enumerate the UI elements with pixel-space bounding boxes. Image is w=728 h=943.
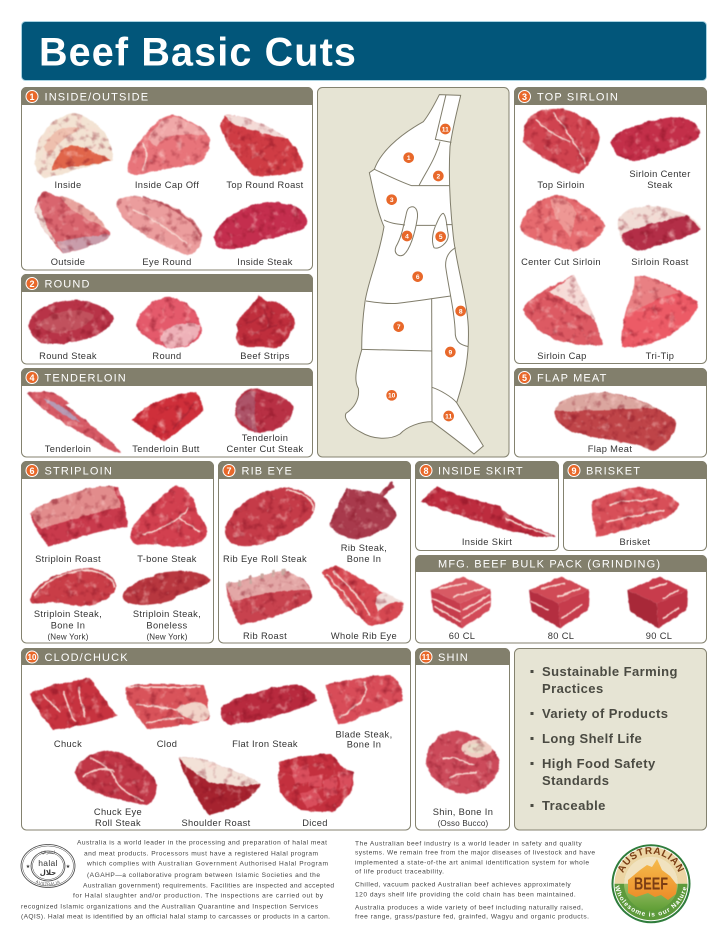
panel: benefits list: Standards — [542, 773, 609, 788]
label: Striploin Steak, Bone In (New York): Striploin Steak, — [34, 609, 102, 619]
icon: 80 CL bulk block — [529, 577, 589, 628]
panel: 3 top sirloin: TOP SIRLOIN — [537, 92, 619, 104]
panel: 4 tenderloin — [21, 368, 313, 457]
label: Striploin Steak, Boneless (New York): (New York) — [146, 632, 188, 642]
icon: halal certification stamp: AUSTRALIA — [36, 880, 60, 886]
panel: mfg. beef bulk pack — [415, 555, 707, 643]
text block: industry statement: free range, grass/pasture fed, grainfed, Wagyu and organic products. — [355, 914, 589, 921]
label: Chuck Eye Roll Steak: Roll Steak — [95, 818, 141, 828]
label: Sirloin Center Steak — [629, 169, 691, 190]
carcass silhouette: 8 — [459, 308, 463, 315]
panel: 8 inside skirt: 8 — [423, 466, 429, 476]
panel: 8 inside skirt: INSIDE SKIRT — [438, 466, 524, 478]
icon: Australian Beef logo: BEEF — [634, 874, 668, 894]
panel: 7 rib eye — [218, 461, 411, 643]
label: Inside: Inside — [55, 180, 81, 190]
label: Round Steak: Round Steak — [39, 351, 97, 361]
panel: benefits list: Traceable — [542, 798, 606, 813]
text block: halal statement: and meat products. Processors must have a registered Halal program — [84, 850, 318, 857]
panel: 9 brisket — [563, 461, 707, 550]
meat photo: inside skirt — [421, 487, 556, 537]
icon: halal certification stamp: أستراليا — [41, 850, 55, 855]
text block: halal statement: Australian government) requirements. Facilities are inspected and accepted — [83, 883, 334, 890]
icon: Australian Beef logo — [612, 844, 690, 924]
label: Clod: Clod — [157, 739, 177, 749]
carcass silhouette: 11 — [445, 413, 452, 420]
label: Rib Steak, Bone In: Rib Steak, — [341, 543, 387, 553]
label: Shin, Bone In (Osso Bucco) — [433, 807, 493, 828]
label: Tri-Tip: Tri-Tip — [646, 351, 674, 361]
panel: 11 shin: 11 — [422, 653, 431, 662]
label: Round: Round — [152, 351, 182, 361]
panel: 2 round: 2 — [29, 279, 35, 289]
label: Center Cut Sirloin: Center Cut Sirloin — [521, 257, 601, 267]
panel: benefits list: Variety of Products — [542, 706, 668, 721]
panel: 6 striploin: 6 — [29, 466, 35, 476]
panel: 10 clod/chuck — [21, 648, 411, 830]
carcass silhouette: 6 — [416, 274, 420, 281]
label: Eye Round: Eye Round — [142, 257, 192, 267]
carcass silhouette: 4 — [405, 233, 409, 240]
text block: industry statement: implemented a state-of-the art animal identification system for whole — [355, 860, 589, 867]
label: Sirloin Cap: Sirloin Cap — [537, 351, 587, 361]
label: Tenderloin: Tenderloin — [45, 444, 91, 454]
panel: benefits list: Long Shelf Life — [542, 731, 642, 746]
label: Chuck Eye Roll Steak: Chuck Eye — [94, 807, 142, 817]
label: Sirloin Center Steak: Sirloin Center — [629, 169, 691, 179]
text block: industry statement: The Australian beef industry is a world leader in safety and quality — [355, 840, 582, 847]
panel: 6 striploin: STRIPLOIN — [44, 466, 113, 478]
panel: benefits list — [514, 648, 706, 830]
panel: benefits list: Sustainable Farming — [542, 664, 678, 679]
label: Blade Steak, Bone In: Blade Steak, — [335, 730, 393, 740]
panel: 2 round: ROUND — [44, 278, 91, 290]
label: Beef Strips: Beef Strips — [240, 351, 290, 361]
icon: halal certification stamp: halal — [38, 858, 58, 868]
icon: Australian Beef logo: AUSTRALIAN — [618, 847, 684, 873]
text block: industry statement — [355, 840, 595, 921]
text block: halal statement: which complies with Australian Government Authorised Halal Program — [86, 860, 328, 868]
carcass silhouette: 9 — [448, 349, 452, 356]
panel: 9 brisket: BRISKET — [586, 466, 641, 478]
label: Tenderloin Butt: Tenderloin Butt — [132, 444, 200, 454]
panel: 6 striploin — [21, 461, 214, 643]
icon: Australian Beef logo: Wholesome is our Nature — [615, 885, 686, 916]
panel: 1 inside/outside — [21, 87, 313, 270]
panel: 5 flap meat label block: 5 — [522, 373, 527, 383]
meat photos: tenderloin — [27, 388, 293, 453]
label: Inside Steak: Inside Steak — [237, 257, 293, 267]
text block: industry statement: systems. We remain free from the major diseases of livestock and have — [355, 850, 595, 857]
meat photos: clod/chuck — [29, 675, 403, 815]
label: T-bone Steak: T-bone Steak — [137, 554, 197, 564]
panel: 10 clod/chuck: CLOD/CHUCK — [44, 652, 129, 664]
text block: industry statement: Chilled, vacuum packed Australian beef achieves approximately — [355, 882, 571, 889]
label: Tenderloin Center Cut Steak: Center Cut Steak — [226, 444, 304, 454]
carcass silhouette: 7 — [397, 324, 401, 331]
panel: 9 brisket: 9 — [571, 466, 577, 476]
icon: halal certification stamp: حلال — [40, 869, 56, 877]
label: Inside Skirt: Inside Skirt — [462, 537, 512, 547]
label: Striploin Steak, Boneless (New York): Boneless — [146, 620, 188, 630]
panel: 11 shin: SHIN — [438, 652, 469, 664]
label: Chuck Eye Roll Steak — [94, 807, 142, 828]
panel: 7 rib eye: RIB EYE — [242, 466, 293, 478]
label: Shoulder Roast: Shoulder Roast — [181, 818, 251, 828]
text block: halal statement: (AQIS). Halal meat is identified by an official halal stamp to carcasses or products in a carton. — [21, 914, 330, 921]
label: Striploin Steak, Bone In (New York) — [34, 609, 102, 642]
label: Inside Cap Off: Inside Cap Off — [135, 180, 199, 190]
label: Outside: Outside — [51, 257, 85, 267]
label: Top Sirloin: Top Sirloin — [537, 180, 585, 190]
label: Sirloin Roast: Sirloin Roast — [631, 257, 689, 267]
panel: 1 inside/outside: INSIDE/OUTSIDE — [44, 92, 149, 104]
text block: industry statement: Australia produces a wide variety of beef including naturally raised, — [355, 904, 583, 911]
label: Sirloin Center Steak: Steak — [647, 180, 673, 190]
title banner: Beef Basic Cuts — [39, 30, 357, 74]
label: Rib Steak, Bone In — [341, 543, 387, 564]
carcass silhouette: 3 — [390, 197, 394, 204]
icon: halal certification stamp — [20, 844, 76, 888]
panel: benefits list: High Food Safety — [542, 756, 656, 771]
label: Flat Iron Steak: Flat Iron Steak — [232, 739, 298, 749]
label: 60 CL: 60 CL — [449, 631, 475, 641]
panel: 3 top sirloin: 3 — [522, 92, 527, 102]
label: Brisket: Brisket — [620, 537, 651, 547]
text block: halal statement: for Halal slaughter and/or production. The inspections are carried out by — [73, 893, 324, 900]
label: Shin, Bone In (Osso Bucco): (Osso Bucco) — [438, 819, 489, 828]
text block: halal statement: (AGAHP—a collaborative program between Islamic Societies and the — [87, 872, 320, 879]
meat photo: shin bone in — [426, 731, 499, 793]
label: Rib Eye Roll Steak: Rib Eye Roll Steak — [223, 554, 307, 564]
meat photo: flap meat — [554, 393, 676, 451]
text block: halal statement: Australia is a world leader in the processing and preparation of halal meat — [77, 840, 327, 846]
panel: 4 tenderloin: 4 — [29, 373, 35, 383]
panel: benefits list: Practices — [542, 681, 604, 696]
label: Blade Steak, Bone In: Bone In — [347, 740, 381, 750]
text block: industry statement: 120 days shelf life providing the cold chain has been maintained. — [355, 891, 576, 898]
carcass silhouette: 1 — [407, 155, 411, 162]
meat photos: striploin — [29, 486, 211, 606]
carcass silhouette: 2 — [436, 173, 440, 180]
label: 90 CL: 90 CL — [646, 631, 672, 641]
text block: halal statement: recognized Islamic organizations and the Australian Quarantine and Inspection Services — [21, 904, 319, 911]
panel: 7 rib eye: 7 — [226, 466, 232, 476]
label: Striploin Steak, Bone In (New York): Bone In — [51, 620, 85, 630]
panel: 5 flap meat label block: FLAP MEAT — [537, 372, 607, 384]
panel: 3 top sirloin — [514, 87, 707, 364]
panel: 5 flap meat label block — [514, 368, 707, 457]
panel: 10 clod/chuck: 10 — [28, 653, 37, 662]
label: Top Round Roast: Top Round Roast — [226, 180, 304, 190]
label: Tenderloin Center Cut Steak — [226, 433, 304, 454]
carcass silhouette: 10 — [388, 393, 396, 400]
carcass silhouette: 11 — [442, 126, 449, 133]
panel: 1 inside/outside: 1 — [29, 92, 35, 102]
meat photos: round — [28, 295, 295, 348]
label: Striploin Roast: Striploin Roast — [35, 554, 101, 564]
panel: 11 shin — [415, 648, 510, 830]
icon: halal certification stamp: ★ — [26, 864, 31, 870]
label: Rib Steak, Bone In: Bone In — [347, 554, 381, 564]
meat photos: top sirloin — [519, 108, 701, 347]
carcass silhouette: 5 — [439, 234, 443, 241]
label: Diced: Diced — [302, 818, 328, 828]
label: Tenderloin Center Cut Steak: Tenderloin — [242, 433, 288, 443]
label: 80 CL: 80 CL — [548, 631, 574, 641]
meat photos: rib eye — [225, 482, 404, 626]
meat photo: brisket — [592, 487, 679, 537]
carcass silhouette — [345, 95, 483, 454]
text block: halal statement — [21, 840, 334, 921]
label: Chuck: Chuck — [54, 739, 82, 749]
label: Whole Rib Eye: Whole Rib Eye — [331, 631, 397, 641]
panel: 4 tenderloin: TENDERLOIN — [44, 372, 127, 384]
label: Flap Meat: Flap Meat — [588, 444, 632, 454]
panel: cut map of the carcass — [318, 88, 509, 457]
meat photos: inside/outside — [35, 113, 307, 254]
label: Blade Steak, Bone In — [335, 730, 393, 750]
icon: 90 CL bulk block — [627, 577, 688, 628]
panel: 2 round — [21, 274, 313, 364]
label: Striploin Steak, Bone In (New York): (New York) — [47, 632, 89, 642]
label: Striploin Steak, Boneless (New York): Striploin Steak, — [133, 609, 201, 619]
icon: 60 CL bulk block — [431, 577, 491, 628]
panel: 8 inside skirt — [415, 461, 559, 550]
text block: industry statement: of life product traceability. — [355, 869, 444, 876]
label: Rib Roast: Rib Roast — [243, 631, 287, 641]
icon: halal certification stamp: ★ — [66, 864, 71, 870]
panel: mfg. beef bulk pack: MFG. BEEF BULK PACK (GRINDING) — [438, 558, 661, 570]
label: Striploin Steak, Boneless (New York) — [133, 609, 201, 642]
label: Shin, Bone In (Osso Bucco): Shin, Bone In — [433, 807, 493, 817]
title banner — [22, 22, 706, 80]
